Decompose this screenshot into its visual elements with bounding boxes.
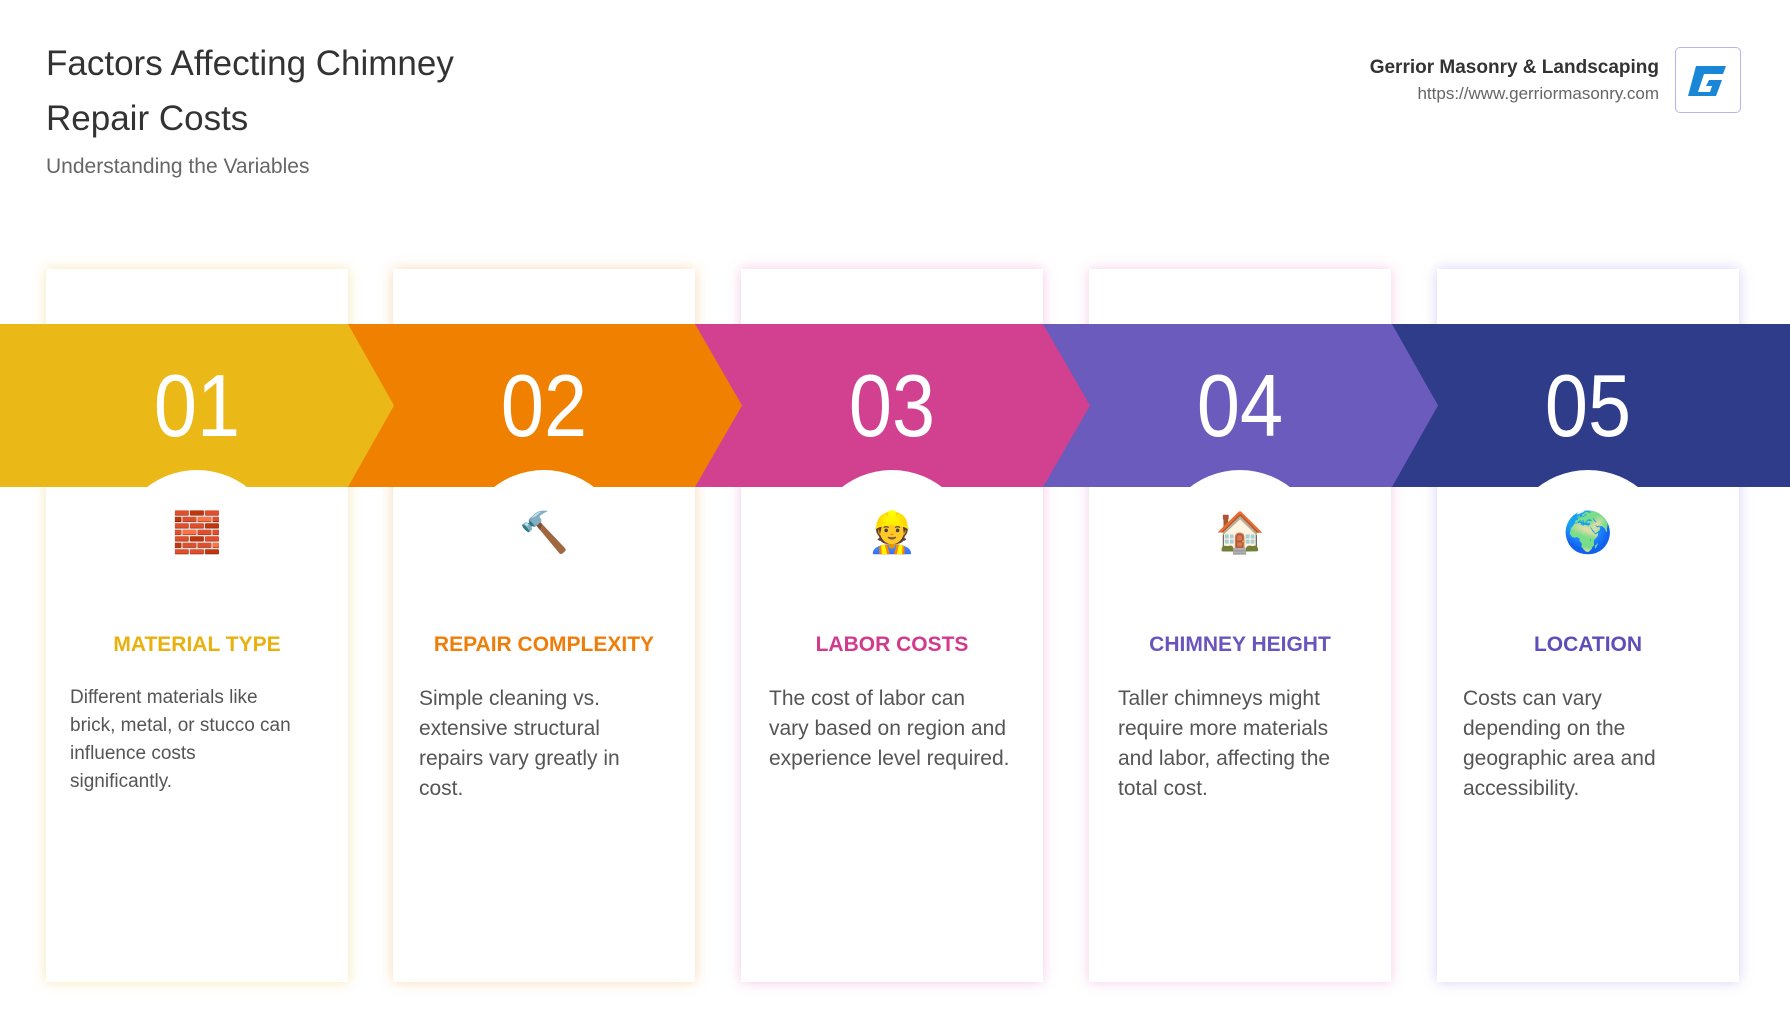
title: [46, 44, 454, 138]
step 4: CHIMNEY HEIGHT: [1149, 633, 1331, 656]
brand text: [1370, 57, 1659, 103]
step 1: MATERIAL TYPE: [113, 633, 281, 656]
step 4: 🏠: [1215, 511, 1265, 555]
step 3: LABOR COSTS: [816, 633, 968, 656]
step 4: 04: [1197, 356, 1283, 455]
step 2: 🔨: [519, 511, 569, 555]
step 3: [769, 356, 1009, 770]
step 4: [1118, 356, 1331, 800]
cards: [46, 269, 348, 982]
step 3: experience level required.: [769, 747, 1009, 770]
step 3: vary based on region and: [769, 717, 1006, 740]
step 5: [1463, 356, 1656, 800]
step 2: Simple cleaning vs. extensive structural repairs vary greatly in cost.: [419, 687, 620, 800]
step 1: Different materials like brick, metal, or stucco can influence costs significantly.: [70, 687, 291, 792]
brand text: Gerrior Masonry & Landscaping: [1370, 57, 1659, 78]
title: Repair Costs: [46, 99, 248, 138]
step 4: Taller chimneys might require more materials and labor, affecting the total cost.: [1118, 687, 1330, 800]
step 3: 👷: [867, 511, 917, 555]
title: Factors Affecting Chimney: [46, 44, 454, 83]
step 1: 01: [154, 356, 240, 455]
step 1: [70, 356, 291, 792]
brand text: https://www.gerriormasonry.com: [1417, 84, 1659, 103]
step 5: LOCATION: [1534, 633, 1642, 656]
step 3: 03: [849, 356, 935, 455]
step 1: 🧱: [172, 511, 222, 555]
step 2: REPAIR COMPLEXITY: [434, 633, 654, 656]
step 5: Costs can vary depending on the geographic area and accessibility.: [1463, 687, 1656, 800]
step 2: [419, 356, 654, 800]
step 5: 05: [1545, 356, 1631, 455]
step 3: The cost of labor can: [769, 687, 965, 710]
step 2: 02: [501, 356, 587, 455]
subtitle: Understanding the Variables: [46, 155, 309, 178]
arrow band: [0, 324, 1790, 487]
step 5: 🌍: [1563, 511, 1613, 555]
logo: [1675, 47, 1741, 113]
